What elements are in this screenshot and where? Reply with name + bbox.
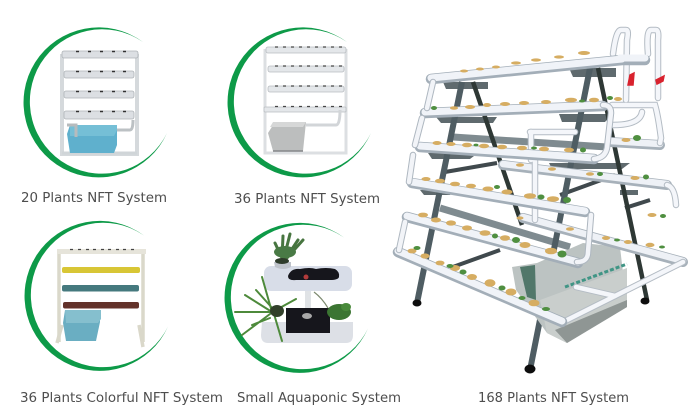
green crescent ring — [228, 27, 371, 177]
reservoir bag — [512, 243, 627, 343]
label: 36 Plants Colorful NFT System: 36 Plants Colorful NFT System — [20, 391, 223, 406]
label: 20 Plants NFT System: 20 Plants NFT System — [21, 191, 167, 206]
panel: 168 plants NFT system — [398, 30, 683, 374]
panel: 36 plants NFT system — [228, 27, 371, 177]
colorful rack with blue tank — [57, 249, 146, 347]
label: 36 Plants NFT System: 36 Plants NFT System — [234, 192, 380, 207]
green crescent ring — [225, 223, 368, 373]
rack with blue tank — [62, 51, 138, 154]
net cups with seedlings — [408, 51, 666, 311]
green crescent ring — [24, 27, 167, 177]
panel: 20 plants NFT system — [24, 27, 167, 177]
rack with grey tank — [264, 47, 346, 153]
red valves — [628, 73, 664, 85]
panel: 36 plants colorful NFT system — [25, 221, 168, 371]
aquaponic planter — [235, 234, 353, 343]
steel A-frame — [412, 68, 650, 374]
label: Small Aquaponic System: Small Aquaponic System — [237, 391, 401, 406]
green crescent ring — [25, 221, 168, 371]
white irrigation pipes — [398, 30, 683, 322]
label: 168 Plants NFT System: 168 Plants NFT System — [478, 391, 629, 406]
panel: small aquaponic system — [225, 223, 368, 373]
